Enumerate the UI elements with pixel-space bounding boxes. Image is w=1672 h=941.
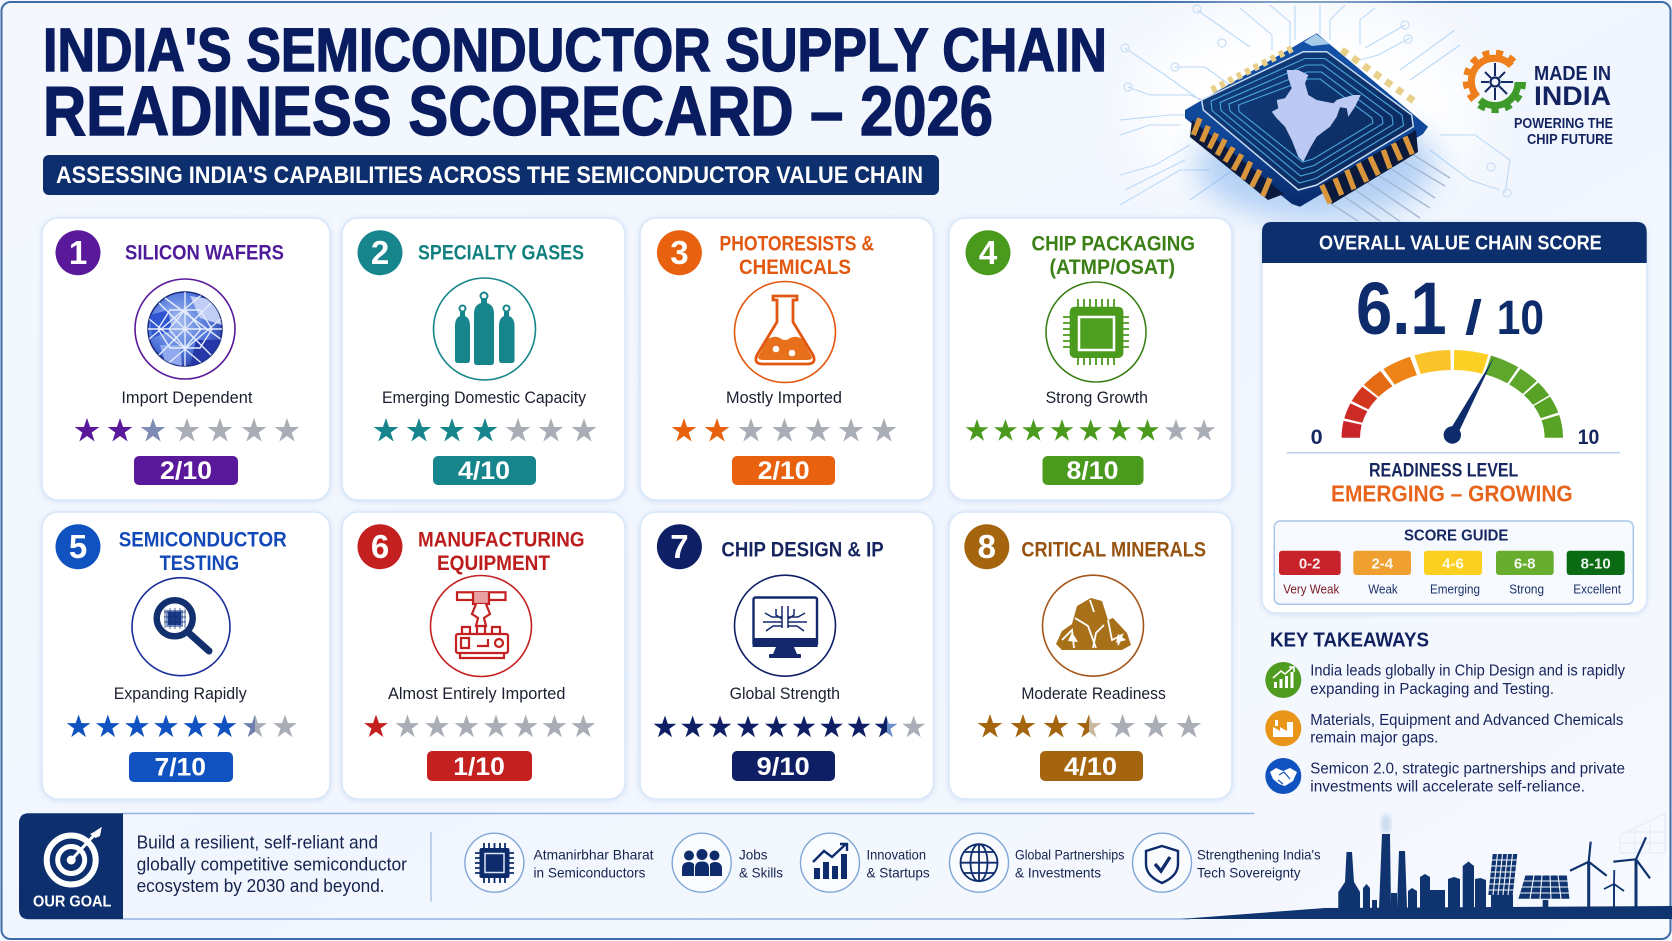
atmanirbhar label: in Semiconductors (534, 865, 645, 881)
takeaway 2: Materials, Equipment and Advanced Chemicals (1310, 712, 1624, 729)
readiness level (1331, 461, 1573, 507)
status: Import Dependent (121, 389, 253, 407)
jobs label (739, 846, 783, 881)
star rating (672, 418, 896, 442)
number badge 4: 4 (979, 234, 998, 271)
goal statement: ecosystem by 2030 and beyond. (137, 876, 385, 896)
panel header (1262, 222, 1647, 263)
heading (1032, 233, 1195, 279)
subtitle banner (43, 155, 939, 195)
score guide: Emerging (1430, 581, 1480, 596)
partnerships label: Global Partnerships (1015, 846, 1124, 862)
panel: overall value chain score (1262, 222, 1647, 613)
heading: PHOTORESISTS & (720, 233, 874, 256)
score pill (1042, 456, 1144, 485)
takeaway 3: investments will accelerate self-reliance. (1310, 779, 1585, 796)
icon: handshake (1265, 758, 1301, 794)
status: Emerging Domestic Capacity (382, 389, 587, 407)
panel: 5 semiconductor testing (42, 512, 330, 799)
panel: 1 silicon wafers (42, 218, 330, 500)
score pill: 8/10 (1066, 457, 1118, 485)
score pill (134, 456, 238, 485)
heading: (ATMP/OSAT) (1050, 256, 1175, 279)
heading: TESTING (160, 552, 239, 575)
icon: chip (465, 833, 524, 892)
title: INDIA'S SEMICONDUCTOR SUPPLY CHAIN (43, 16, 1107, 84)
logo: Made in India: CHIP FUTURE (1527, 132, 1613, 148)
title (43, 16, 1107, 150)
icon: shield (1132, 833, 1192, 892)
sovereignty label (1197, 846, 1321, 881)
number badge 8: 8 (978, 528, 996, 565)
heading: KEY TAKEAWAYS (1270, 629, 1429, 651)
number badge 6: 6 (371, 528, 389, 565)
partnerships label (1015, 846, 1124, 881)
score guide: Strong (1509, 581, 1544, 596)
partnerships label: & Investments (1015, 865, 1101, 881)
score pill (732, 751, 835, 781)
panel: 6 manufacturing equipment (342, 512, 625, 799)
star rating (978, 714, 1201, 738)
our goal badge (19, 813, 123, 919)
takeaway 1: expanding in Packaging and Testing. (1310, 681, 1554, 698)
star rating (654, 716, 925, 737)
heading (418, 529, 584, 575)
number badge 7: 7 (670, 528, 689, 565)
panel: 3 photoresists and chemicals (640, 218, 934, 500)
heading: MANUFACTURING (418, 529, 584, 552)
status: Mostly Imported (726, 389, 842, 407)
score pill: 9/10 (756, 753, 810, 781)
score pill (427, 751, 532, 781)
icon: rocks (1042, 575, 1144, 676)
jobs label: Jobs (739, 846, 768, 862)
heading: SPECIALTY GASES (418, 242, 584, 264)
score pill: 1/10 (453, 753, 505, 781)
status: Global Strength (730, 685, 840, 703)
heading: CHIP PACKAGING (1032, 233, 1195, 256)
score guide: 8-10 (1581, 555, 1611, 572)
gauge (1311, 350, 1599, 449)
heading: CHIP DESIGN & IP (721, 539, 884, 562)
score guide: SCORE GUIDE (1404, 528, 1509, 545)
star rating (67, 714, 297, 737)
gauge: 10 (1578, 426, 1599, 449)
score pill: 2/10 (160, 457, 212, 485)
key takeaways (1265, 629, 1625, 796)
icon: factory (1265, 710, 1301, 746)
icon: gas cylinders (434, 278, 536, 380)
logo: Made in India: INDIA (1534, 81, 1611, 111)
score pill (433, 456, 536, 485)
atmanirbhar label (534, 846, 654, 881)
star rating (364, 714, 595, 737)
number badge 1: 1 (69, 234, 87, 271)
takeaway 2: remain major gaps. (1310, 730, 1438, 747)
score guide: 0-2 (1299, 555, 1321, 572)
number badge 5: 5 (69, 528, 87, 565)
overall score: 6.1 (1356, 267, 1447, 350)
heading (720, 233, 874, 279)
takeaway 3 (1310, 760, 1625, 796)
logo: Made in India (1466, 53, 1613, 148)
score pill (129, 752, 233, 782)
panel: 4 chip packaging (949, 218, 1232, 500)
star rating (75, 418, 299, 442)
heading: CHEMICALS (739, 256, 851, 279)
icon: people (672, 833, 731, 892)
atmanirbhar label: Atmanirbhar Bharat (534, 846, 654, 862)
overall score: / (1465, 292, 1482, 345)
number badge 3: 3 (670, 234, 689, 271)
score guide: Very Weak (1283, 581, 1340, 596)
gauge: 0 (1311, 426, 1323, 449)
icon: green chip (1046, 282, 1146, 382)
number badge 7 (657, 524, 702, 569)
panel: 8 critical minerals (949, 512, 1232, 799)
score guide (1274, 521, 1633, 604)
icon: equipment (430, 576, 532, 676)
overall score: 10 (1497, 292, 1544, 345)
goal statement (137, 832, 407, 896)
score guide: Weak (1368, 581, 1398, 596)
innovation label: Innovation (866, 846, 926, 862)
icon: growth bars (800, 833, 860, 892)
score pill (732, 456, 835, 485)
icon: flask (734, 282, 836, 382)
panel: 7 chip design and IP (640, 512, 934, 799)
score guide: Excellent (1573, 581, 1621, 596)
star rating (966, 419, 1215, 441)
innovation label (866, 846, 930, 881)
heading (119, 529, 287, 575)
number badge 6 (358, 524, 402, 569)
number badge 4 (966, 230, 1010, 275)
title: READINESS SCORECARD – 2026 (43, 72, 993, 150)
number badge 3 (657, 230, 702, 275)
heading: EQUIPMENT (437, 552, 550, 575)
sovereignty label: Strengthening India's (1197, 846, 1321, 862)
status: Moderate Readiness (1021, 685, 1166, 703)
goal statement: globally competitive semiconductor (137, 854, 407, 874)
chip illustration with India map (1120, 5, 1511, 232)
number badge 8 (964, 524, 1009, 569)
sovereignty label: Tech Sovereignty (1197, 865, 1300, 881)
takeaway 2 (1310, 712, 1624, 747)
status: Expanding Rapidly (114, 685, 247, 703)
icon: wafer (135, 279, 235, 379)
readiness level: EMERGING – GROWING (1331, 481, 1573, 507)
takeaway 3: Semicon 2.0, strategic partnerships and private (1310, 760, 1625, 777)
takeaway 1: India leads globally in Chip Design and is rapidly (1310, 663, 1625, 680)
heading: SILICON WAFERS (125, 242, 284, 264)
score guide: 2-4 (1371, 555, 1394, 572)
heading: SEMICONDUCTOR (119, 529, 287, 552)
overall score (1356, 267, 1544, 350)
number badge 5 (56, 524, 100, 569)
gauge needle (1444, 357, 1494, 444)
number badge 1 (56, 230, 100, 275)
panel header: OVERALL VALUE CHAIN SCORE (1319, 232, 1602, 254)
logo: Made in India: MADE IN (1534, 63, 1611, 85)
status: Strong Growth (1046, 389, 1148, 407)
subtitle banner: ASSESSING INDIA'S CAPABILITIES ACROSS THE SEMICONDUCTOR VALUE CHAIN (56, 162, 923, 189)
innovation label: & Startups (866, 865, 930, 881)
icon: monitor (734, 575, 836, 676)
score pill: 4/10 (458, 457, 510, 485)
number badge 2 (358, 230, 402, 275)
score pill (1040, 751, 1143, 781)
goal statement: Build a resilient, self-reliant and (137, 832, 378, 852)
logo: Made in India: POWERING THE (1514, 116, 1613, 132)
readiness level: READINESS LEVEL (1369, 461, 1519, 482)
takeaway 1 (1310, 663, 1625, 698)
heading: CRITICAL MINERALS (1021, 539, 1206, 562)
jobs label: & Skills (739, 865, 783, 881)
icon: magnifier (132, 578, 230, 676)
number badge 2: 2 (371, 234, 389, 271)
our goal badge: OUR GOAL (33, 894, 112, 911)
icon: gear (1466, 53, 1523, 110)
icon: globe (950, 833, 1008, 892)
score guide: 4-6 (1442, 555, 1464, 572)
goal bar (19, 813, 1321, 919)
score pill: 4/10 (1064, 753, 1117, 781)
icon: target (47, 827, 102, 884)
status: Almost Entirely Imported (388, 685, 565, 703)
score pill: 2/10 (758, 457, 810, 485)
score pill: 7/10 (154, 754, 206, 782)
panel: 2 specialty gases (342, 218, 625, 500)
score guide: 6-8 (1514, 555, 1536, 572)
icon: growth chart (1265, 662, 1301, 698)
skyline illustration (1180, 813, 1672, 919)
star rating (374, 418, 596, 442)
